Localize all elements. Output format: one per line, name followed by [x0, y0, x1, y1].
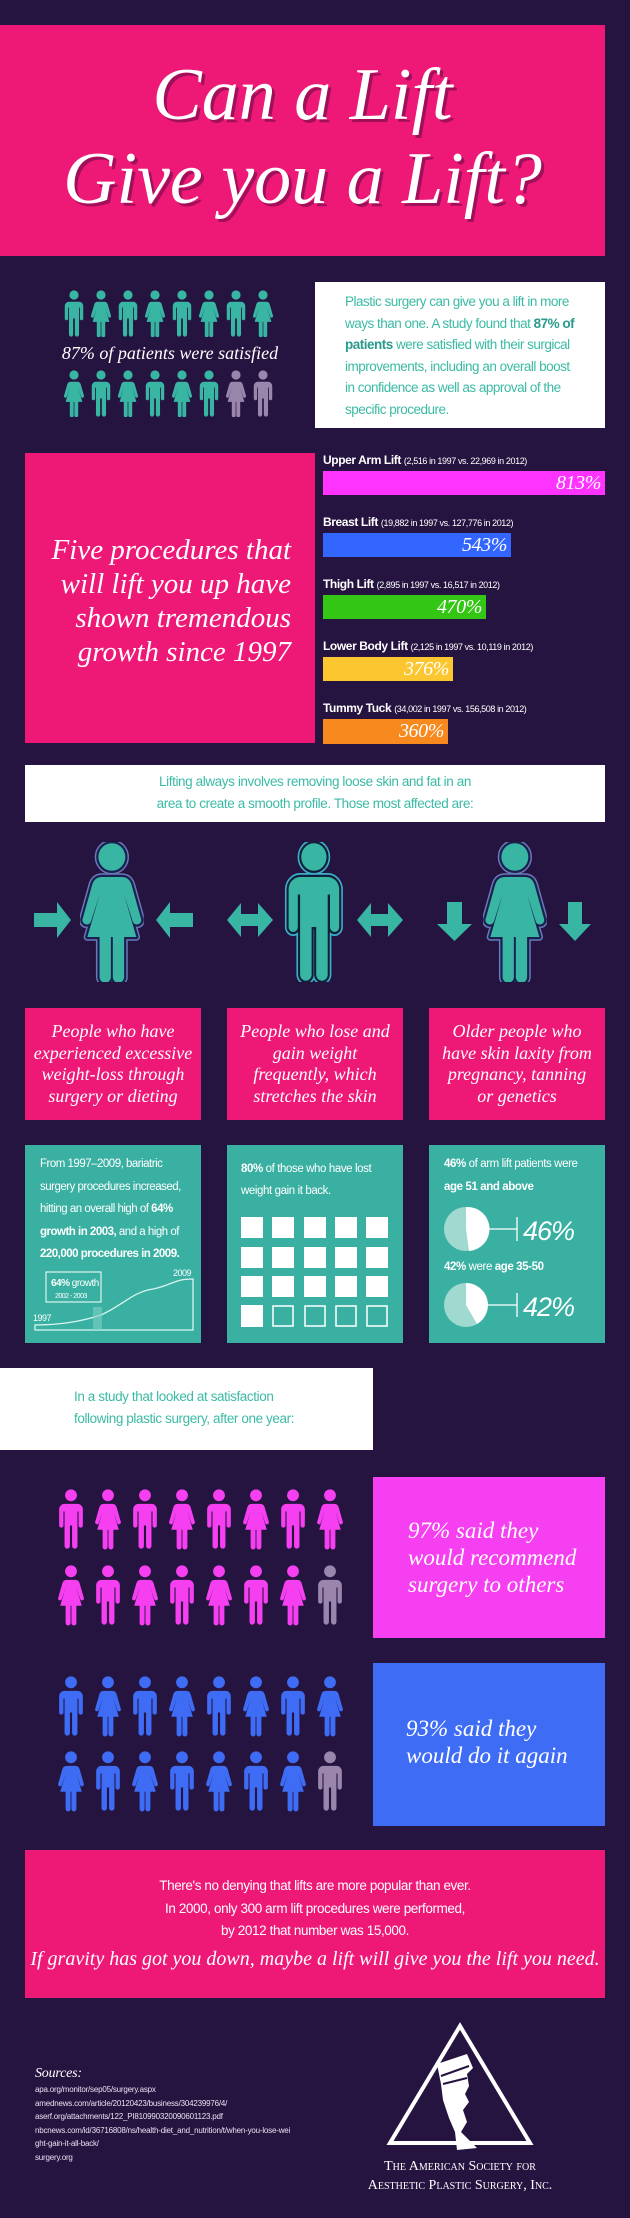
panel: five procedures heading	[25, 453, 315, 743]
arrow: double left-right 2	[357, 903, 403, 937]
arrow: down 2	[559, 902, 591, 941]
line chart: bariatric growth: 2009	[173, 1268, 192, 1278]
line chart: bariatric growth: 2002 - 2003	[55, 1293, 87, 1300]
panel: 80% regain: 80% of those who have lost weight gain it back.	[241, 1163, 371, 1197]
panel: weight-loss group: People who have experienced excessive weight-loss through surgery or dieting	[34, 1021, 192, 1106]
bar: thigh lift: 470%	[437, 596, 482, 618]
callout: 93% do it again: 93% said they	[406, 1716, 536, 1741]
icon: man yo-yo	[289, 843, 339, 981]
intro text box	[315, 282, 605, 428]
bar: tummy tuck: 360%	[399, 720, 444, 742]
callout: 93% do it again: would do it again	[406, 1743, 568, 1768]
study text box	[0, 1368, 373, 1450]
bar: breast lift: 543%	[462, 534, 507, 556]
sources: aserf.org/attachments/122_PI810990320090601123.pdf	[35, 2112, 223, 2121]
sources: surgery.org	[35, 2152, 73, 2162]
sources	[35, 2066, 290, 2162]
logo text	[368, 2159, 552, 2193]
callout: 97% recommend: surgery to others	[408, 1572, 564, 1597]
arrow: double left-right	[227, 903, 273, 937]
conclusion text: There's no denying that lifts are more popular than ever.	[159, 1878, 471, 1893]
panel: older group	[429, 1008, 605, 1120]
grid chart: 16 of 20 squares	[241, 1217, 388, 1327]
bar: upper arm lift: 813%	[556, 472, 601, 494]
panel: yo-yo group	[227, 1008, 403, 1120]
closing tagline: If gravity has got you down, maybe a lift will give you the lift you need.	[30, 1948, 600, 1970]
bar: tummy tuck: Tummy Tuck (34,002 in 1997 vs. 156,508 in 2012)	[323, 701, 526, 715]
logo text: Aesthetic Plastic Surgery, Inc.	[368, 2178, 552, 2193]
icon group: 87% satisfied people	[62, 290, 278, 417]
sources: nbcnews.com/id/36716808/ns/health-diet_and_nutrition/t/when-you-lose-wei	[35, 2126, 290, 2134]
callout: 93% do it again	[373, 1663, 605, 1826]
lifting text box: Lifting always involves removing loose skin and fat in an	[159, 774, 471, 789]
bar: tummy tuck	[323, 701, 526, 744]
pie chart: 46%	[444, 1207, 574, 1251]
title text: Give you a Lift?	[63, 138, 542, 220]
pie chart: 42%	[444, 1283, 574, 1327]
line chart: bariatric growth: 64% growth	[51, 1278, 99, 1289]
icon group: 93% would do again	[58, 1676, 343, 1812]
bar: thigh lift	[323, 577, 500, 619]
callout: 97% recommend: 97% said they	[408, 1518, 538, 1543]
panel: arm lift ages	[429, 1145, 605, 1343]
title banner	[0, 25, 605, 256]
title text	[63, 54, 544, 222]
panel: five procedures heading: Five procedures that will lift you up have shown tremendous growth since 1997	[52, 534, 291, 668]
panel: arm lift ages: age 51 and above	[444, 1180, 533, 1192]
callout: 97% recommend	[373, 1477, 605, 1638]
line chart: bariatric growth: 1997	[33, 1313, 52, 1323]
logo text: The American Society for	[384, 2159, 536, 2174]
conclusion panel	[25, 1850, 605, 1998]
bar: thigh lift: Thigh Lift (2,895 in 1997 vs. 16,517 in 2012)	[323, 577, 500, 591]
icons: affected people with arrows	[34, 842, 591, 982]
conclusion text: In 2000, only 300 arm lift procedures were performed,	[165, 1900, 465, 1916]
logo: ASAPS	[368, 2022, 552, 2193]
conclusion text	[159, 1878, 471, 1938]
panel: 80% regain	[227, 1145, 403, 1343]
conclusion text: by 2012 that number was 15,000.	[221, 1923, 409, 1938]
bar: breast lift: Breast Lift (19,882 in 1997 vs. 127,776 in 2012)	[323, 515, 513, 529]
panel: arm lift ages: 46% of arm lift patients were	[444, 1158, 578, 1170]
sources: Sources:	[35, 2066, 82, 2081]
bar: lower body lift: Lower Body Lift (2,125 in 1997 vs. 10,119 in 2012)	[323, 639, 533, 653]
intro text box: Plastic surgery can give you a lift in more ways than one. A study found that 87% of patients were satisfied with their surgical improvements, including an overall boost in confidence as well as approval of the specific procedure.	[345, 294, 574, 416]
bar: upper arm lift: Upper Arm Lift (2,516 in 1997 vs. 22,969 in 2012)	[323, 453, 527, 467]
panel: weight-loss group	[25, 1008, 201, 1120]
sources: ght-gain-it-all-back/	[35, 2139, 99, 2148]
bar chart: procedure growth	[323, 453, 605, 744]
arrow: left pointing	[156, 902, 193, 938]
panel: yo-yo group: People who lose and gain weight frequently, which stretches the skin	[240, 1021, 390, 1106]
sources: apa.org/monitor/sep05/surgery.aspx	[35, 2085, 156, 2094]
panel: older group: Older people who have skin laxity from pregnancy, tanning or genetics	[442, 1021, 592, 1106]
icon group: 97% recommend	[58, 1489, 343, 1626]
line chart: bariatric growth	[33, 1268, 194, 1331]
bar: lower body lift: 376%	[404, 658, 449, 680]
pie chart: 42%: 42%	[523, 1292, 574, 1322]
study text box: In a study that looked at satisfaction	[74, 1389, 273, 1404]
icon: older woman	[485, 843, 544, 983]
caption: 87% of patients were satisfied: 87% of patients were satisfied	[62, 343, 278, 363]
lifting text box: area to create a smooth profile. Those most affected are:	[157, 796, 473, 811]
bar: breast lift	[323, 515, 513, 557]
sources: amednews.com/article/20120423/business/304239976/4/	[35, 2098, 227, 2108]
study text box: following plastic surgery, after one year:	[74, 1411, 294, 1426]
arrow: right pointing	[34, 902, 71, 938]
bar: upper arm lift	[323, 453, 605, 495]
text: 42% age 35-50: 42% were age 35-50	[444, 1261, 544, 1273]
panel: bariatric stats	[25, 1145, 201, 1343]
title text: Can a Lift	[152, 54, 453, 136]
callout: 97% recommend: would recommend	[408, 1545, 576, 1570]
arrow: down	[437, 902, 472, 941]
pie chart: 46%: 46%	[523, 1216, 574, 1246]
icon: woman compressed	[82, 843, 141, 983]
lifting text box	[25, 765, 605, 822]
bar: lower body lift	[323, 639, 533, 681]
panel: bariatric stats: From 1997–2009, bariatric surgery procedures increased, hitting an overall high of 64% growth in 2003, and a high of 220,000 procedures in 2009.	[40, 1158, 181, 1260]
